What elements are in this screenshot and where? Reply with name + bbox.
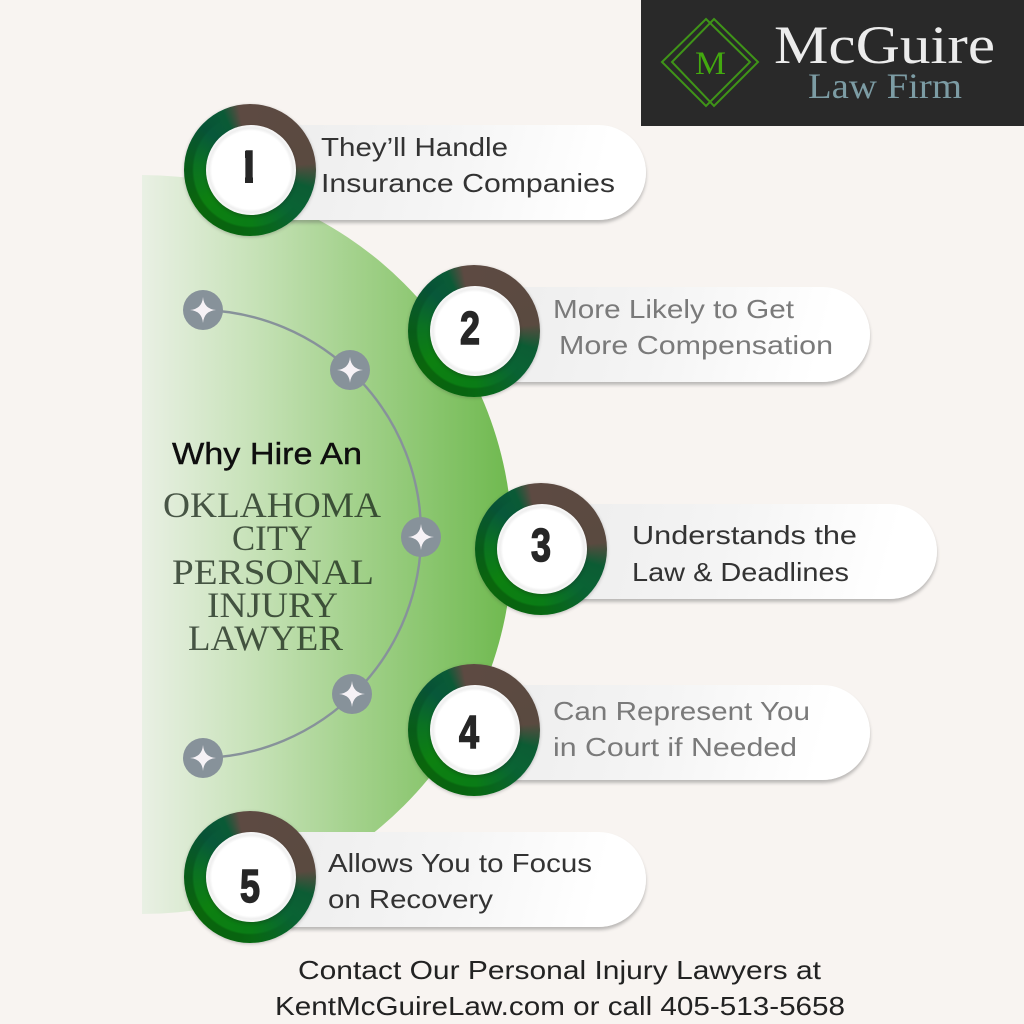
timeline node 3 [401,517,441,557]
heading line: Why Hire An [172,436,362,471]
timeline node 4 [332,674,372,714]
logo subtitle: Law Firm [808,66,962,106]
logo diamond icon [662,19,758,106]
step 2 text: More Likely to Get [553,294,795,324]
step 2 pill [510,287,870,382]
timeline node 5 [183,738,223,778]
step 3 text: Law & Deadlines [632,557,849,587]
step 4 pill [510,685,870,780]
step 5 text [240,848,592,914]
step 5 text: on Recovery [328,884,493,914]
step 4 ring [408,664,540,796]
step 4 text: in Court if Needed [553,732,797,762]
step 3: law and deadlines [474,482,938,618]
footer contact text: Contact Our Personal Injury Lawyers at [298,955,822,985]
logo diamond icon: M [695,46,726,82]
step 1 text [245,132,615,198]
step 1 text: They’ll Handle [321,132,508,162]
step 4 text [458,696,810,762]
step 2 text: More Compensation [559,330,833,360]
step 2 text [460,294,833,360]
step 5 ring [184,811,316,943]
timeline node 1 [183,290,223,330]
logo panel [641,0,1024,126]
step 1 pill [290,125,646,220]
step 3 text: 3 [531,519,551,571]
green semicircle [142,175,512,914]
step 4 text: Can Represent You [553,696,810,726]
step 1 ring [184,104,316,236]
serif heading: INJURY [207,585,338,625]
step 3 pill [577,504,937,599]
step 3 ring [475,483,607,615]
step 4 text: 4 [459,706,479,758]
step 2 text: 2 [460,302,480,354]
step 3 text [531,519,857,587]
timeline arc [203,310,421,758]
logo firm name: McGuire [774,15,995,75]
step 1 text: 1 [236,141,260,193]
step 5: focus on recovery [182,810,648,946]
serif heading: LAWYER [188,618,343,658]
step 5 text: Allows You to Focus [328,848,592,878]
step 5 pill [290,832,646,927]
step 1 text: Insurance Companies [321,168,615,198]
serif heading: OKLAHOMA [163,485,381,525]
step 4: represent in court [406,664,872,798]
serif heading [163,485,381,658]
step 5 text: 5 [240,860,260,912]
footer contact text: KentMcGuireLaw.com or call 405-513-5658 [275,991,845,1021]
footer contact text [275,955,845,1021]
timeline node 2 [330,350,370,390]
serif heading: PERSONAL [172,552,374,592]
serif heading: CITY [232,518,313,558]
step 1: insurance companies [182,104,648,238]
step 3 text: Understands the [632,520,857,550]
step 2: more compensation [406,264,872,400]
step 2 ring [408,265,540,397]
